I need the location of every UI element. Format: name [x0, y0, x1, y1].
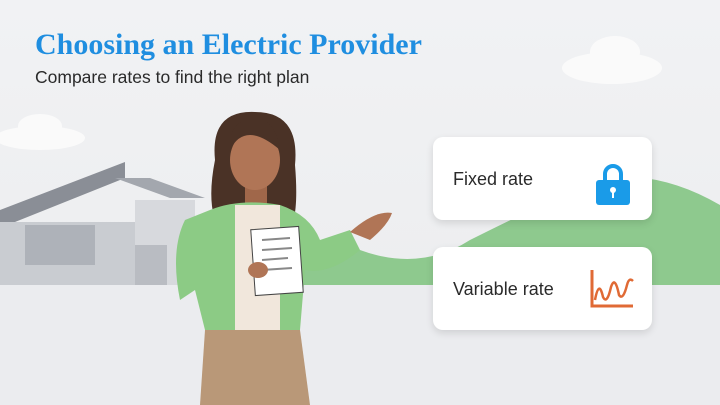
- icon: chart: [590, 270, 634, 308]
- card: variable rate: [433, 247, 652, 330]
- person: [176, 112, 392, 405]
- house: [0, 162, 205, 285]
- subtitle: Compare rates to find the right plan: [35, 67, 309, 87]
- card: variable rate: Variable rate: [453, 279, 554, 299]
- card: fixed rate: [433, 137, 652, 220]
- card: fixed rate: Fixed rate: [453, 169, 533, 189]
- icon: lock: [596, 164, 630, 205]
- clouds: [0, 36, 662, 150]
- hills: [280, 177, 720, 285]
- title: Choosing an Electric Provider: [35, 28, 422, 61]
